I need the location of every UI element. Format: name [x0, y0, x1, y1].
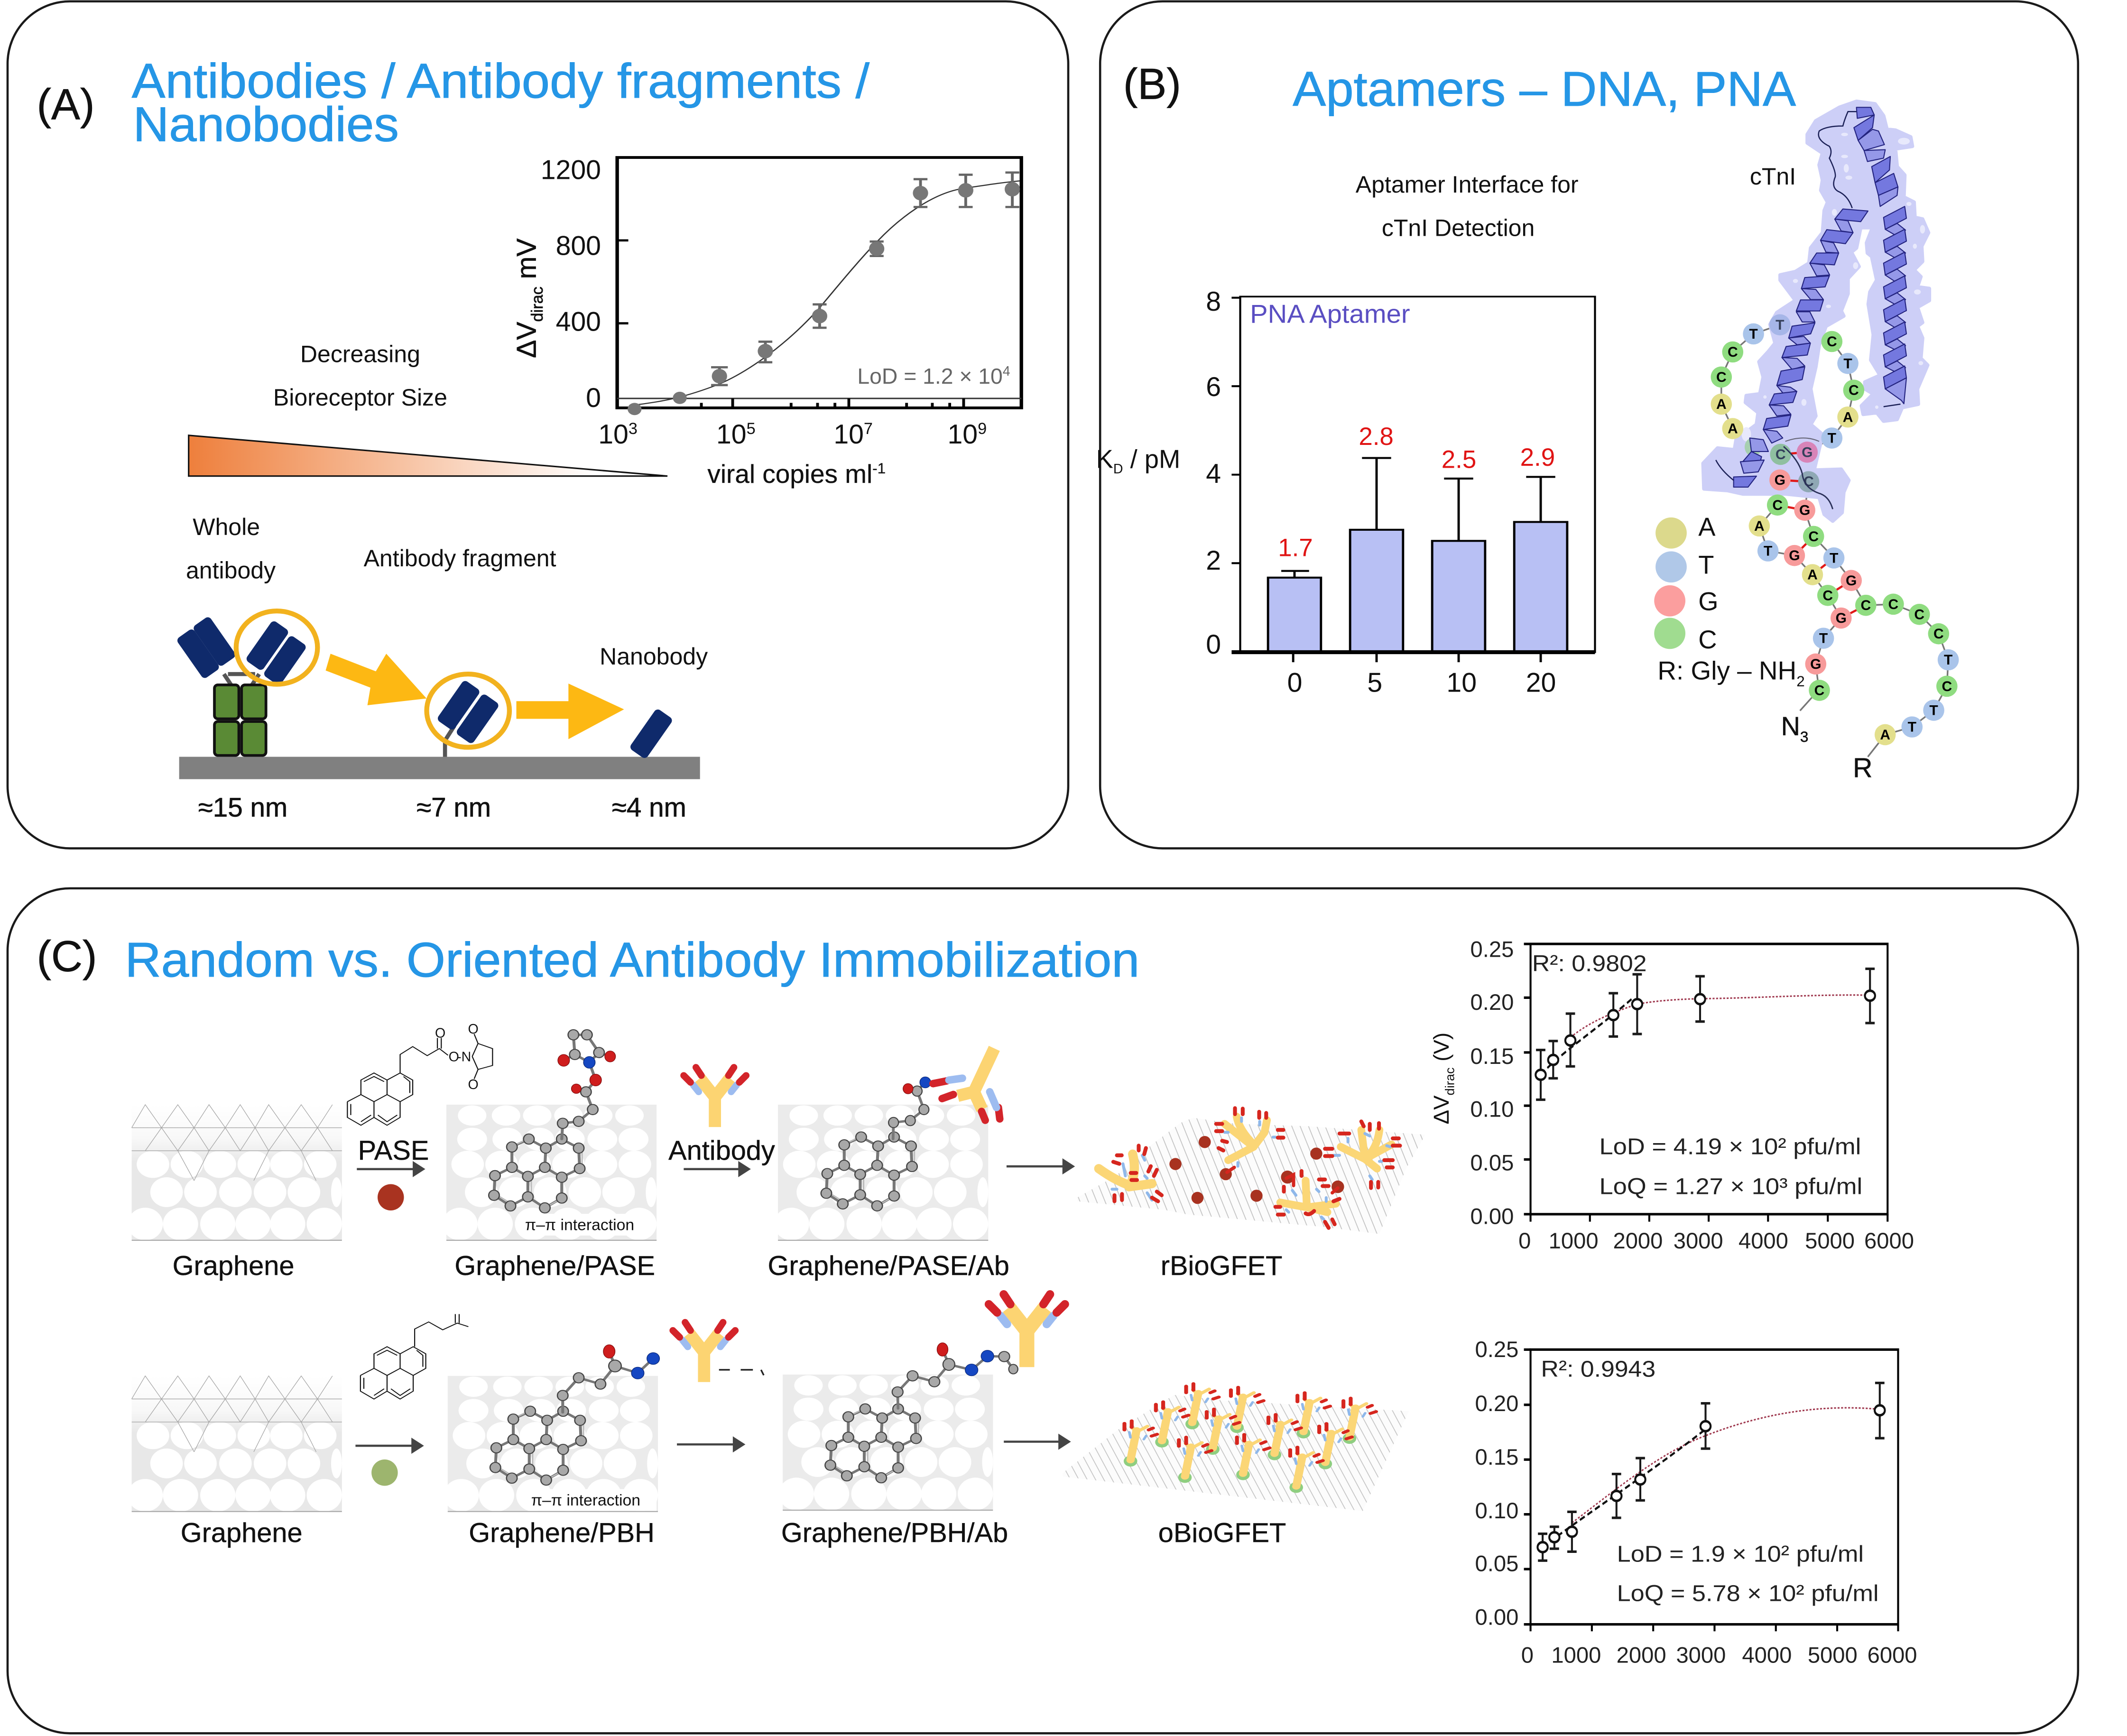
chart: rBioGFET calibration: 0.15 [1470, 1043, 1514, 1069]
chart: viral copies response curve: 10 [948, 419, 978, 450]
terminus labels: N [1781, 711, 1800, 741]
antibody, top row [684, 1067, 746, 1127]
arrow PASE [357, 1163, 423, 1175]
arrow: whole antibody to fragment [325, 654, 426, 705]
DNA nucleotide beads: T [1929, 702, 1938, 718]
chart: rBioGFET calibration: 0.00 [1470, 1204, 1514, 1229]
DNA nucleotide beads: A [1843, 409, 1853, 425]
arrow PBH [355, 1440, 422, 1452]
base pairs [1777, 452, 1866, 618]
terminus labels: 3 [1800, 729, 1808, 745]
DNA nucleotide beads: G [1799, 503, 1810, 518]
DNA nucleotide beads: C [1716, 369, 1727, 385]
chart: viral copies response curve: 10 [598, 419, 629, 450]
bioreceptor size label [273, 341, 447, 411]
chart: rBioGFET calibration [1429, 936, 1914, 1253]
subtitle: Aptamer Interface for [1356, 171, 1579, 198]
DNA nucleotide beads: C [1942, 679, 1952, 694]
PASE structure: O [435, 1025, 445, 1041]
DNA nucleotide beads: A [1754, 518, 1765, 534]
arrow PBH antibody [677, 1438, 743, 1450]
nucleotide legend: T [1698, 551, 1714, 580]
bottom row labels: oBioGFET [1158, 1518, 1286, 1548]
rBioGFET device [1077, 1108, 1425, 1234]
chart: rBioGFET calibration: R²: 0.9802 [1532, 951, 1647, 976]
bar chart: KD by condition: 6 [1206, 372, 1221, 402]
label: antibody fragment: Antibody fragment [364, 545, 556, 572]
graphene sheet, top row [128, 1105, 342, 1240]
PASE structure [347, 1022, 492, 1125]
bar chart: KD by condition: 0 [1287, 667, 1302, 698]
chart: rBioGFET calibration: ΔV [1429, 1095, 1453, 1124]
terminus labels [1781, 711, 1872, 783]
label: whole antibody: Whole [193, 514, 260, 540]
chart: viral copies response curve: 0 [586, 383, 601, 413]
DNA nucleotide beads: C [1776, 447, 1786, 462]
bottom row labels: Graphene [181, 1518, 303, 1548]
chart: rBioGFET calibration: LoQ = 1.27 × 10³ pfu/ml [1599, 1174, 1862, 1200]
chart: rBioGFET calibration: 3000 [1674, 1228, 1723, 1253]
chart: rBioGFET calibration: 1000 [1549, 1228, 1599, 1253]
DNA nucleotide beads: A [1807, 567, 1818, 583]
DNA nucleotide beads: T [1843, 356, 1852, 371]
PASE structure: -N [457, 1049, 471, 1064]
icon: antibody fragment [427, 674, 509, 757]
chart: viral copies response curve [512, 155, 1021, 489]
DNA nucleotide beads: C [1849, 383, 1859, 398]
chart: viral copies response curve: 7 [864, 420, 873, 438]
right alpha helix [1854, 107, 1906, 404]
nucleotide legend [1654, 512, 1805, 690]
chart: rBioGFET calibration: 0 [1518, 1228, 1531, 1253]
chart: oBioGFET calibration: 0.00 [1475, 1605, 1518, 1630]
arrow to rBioGFET [1007, 1160, 1073, 1173]
DNA nucleotide beads: C [1814, 683, 1824, 698]
panel C: random vs oriented [8, 888, 2078, 1733]
PASE structure: O [468, 1022, 479, 1037]
chart: viral copies response curve: 4 [1003, 364, 1010, 379]
panel label B: (B) [1123, 60, 1181, 109]
bar chart: KD by condition: 4 [1206, 459, 1221, 489]
size labels: ≈7 nm [416, 792, 491, 822]
chart: rBioGFET calibration: (V) [1429, 1033, 1453, 1067]
chart: viral copies response curve: dirac [528, 286, 546, 322]
label: whole antibody [186, 514, 276, 584]
chart: viral copies response curve: 400 [556, 307, 601, 337]
DNA nucleotide beads: G [1775, 472, 1785, 488]
chart: rBioGFET calibration: 0.20 [1470, 989, 1514, 1015]
top row labels: Graphene [173, 1251, 294, 1281]
arrow to oBioGFET [1004, 1436, 1069, 1448]
DNA nucleotide beads: T [1749, 326, 1758, 342]
chart: oBioGFET calibration: 2000 [1617, 1643, 1666, 1668]
chart: oBioGFET calibration: 0.25 [1475, 1337, 1518, 1362]
chart: rBioGFET calibration: 0.05 [1470, 1150, 1514, 1175]
bar chart: KD by condition: 20 [1526, 667, 1556, 698]
DNA aptamer backbone [1721, 325, 1948, 757]
chart: rBioGFET calibration: 2000 [1613, 1228, 1663, 1253]
panel A title: Nanobodies [133, 97, 399, 151]
chart: viral copies response curve: viral copies ml [707, 459, 872, 489]
bar chart: KD by condition: / pM [1123, 444, 1180, 473]
chart: viral copies response curve: 5 [747, 420, 756, 438]
bioreceptor size label: Decreasing [300, 341, 420, 367]
DNA nucleotide beads: G [1789, 548, 1800, 563]
label PASE: PASE [358, 1136, 429, 1166]
oBioGFET device [1063, 1384, 1409, 1511]
arrow Antibody [684, 1163, 749, 1175]
icon: green PBH ball [371, 1459, 398, 1486]
chart: oBioGFET calibration: 0.05 [1475, 1551, 1518, 1576]
nucleotide legend: R: Gly – NH [1657, 656, 1796, 685]
DNA nucleotide beads: G [1810, 656, 1821, 672]
top row labels: Graphene/PASE/Ab [768, 1251, 1009, 1281]
DNA nucleotide beads: T [1764, 543, 1773, 559]
chart: rBioGFET calibration: LoD = 4.19 × 10² pfu/ml [1599, 1134, 1861, 1159]
nucleotide legend: C [1698, 625, 1717, 654]
bottom row labels: Graphene/PBH [469, 1518, 655, 1548]
DNA nucleotide beads: A [1880, 727, 1890, 743]
bar chart: KD by condition: K [1096, 444, 1113, 473]
protein loops [1716, 111, 1900, 480]
graphene with PBH [444, 1345, 659, 1512]
chart: viral copies response curve: -1 [872, 460, 886, 477]
chart: oBioGFET calibration: 3000 [1676, 1643, 1726, 1668]
subtitle: cTnI Detection [1382, 215, 1535, 241]
top row labels [173, 1251, 1282, 1281]
chart: viral copies response curve: 1200 [541, 155, 601, 185]
left alpha helix [1734, 209, 1868, 487]
protein tail over aptamer [1784, 438, 1833, 509]
DNA nucleotide beads: A [1716, 397, 1727, 412]
DNA nucleotide beads: C [1808, 529, 1819, 545]
chart: viral copies response curve: 3 [629, 420, 638, 438]
DNA nucleotide beads: G [1846, 573, 1857, 589]
chart: viral copies response curve: ΔV [512, 322, 542, 358]
panel C title: Random vs. Oriented Antibody Immobilization [125, 933, 1139, 987]
decreasing size wedge [189, 435, 667, 476]
DNA nucleotide beads: T [1944, 652, 1953, 668]
DNA nucleotide beads: C [1914, 607, 1924, 622]
chart: oBioGFET calibration: R²: 0.9943 [1541, 1356, 1655, 1382]
chart: rBioGFET calibration: 6000 [1864, 1228, 1914, 1253]
panel A: antibodies [8, 1, 1068, 849]
panel A title: Antibodies / Antibody fragments / [132, 54, 870, 108]
bar chart: KD by condition: 2.9 [1520, 443, 1555, 471]
label: whole antibody: antibody [186, 557, 276, 584]
chart: oBioGFET calibration: LoD = 1.9 × 10² pfu/ml [1617, 1542, 1864, 1567]
bar chart: KD by condition: 10 [1446, 667, 1477, 698]
PBH structure [361, 1314, 468, 1399]
DNA nucleotide beads: T [1776, 317, 1785, 333]
DNA nucleotide beads: C [1822, 588, 1833, 603]
graphene sheet, bottom row [128, 1376, 342, 1512]
chart: rBioGFET calibration: 5000 [1805, 1228, 1855, 1253]
DNA nucleotide beads: C [1827, 334, 1837, 350]
DNA nucleotide beads: T [1819, 631, 1828, 646]
size labels: ≈4 nm [612, 792, 686, 822]
graphene with PASE and antibody [774, 1048, 1000, 1240]
protein: cTnI [1703, 102, 1929, 521]
label Antibody: Antibody [668, 1136, 775, 1166]
top row labels: rBioGFET [1161, 1251, 1282, 1281]
chart: rBioGFET calibration: 4000 [1739, 1228, 1788, 1253]
nucleotide legend: A [1698, 512, 1716, 541]
DNA nucleotide beads: C [1772, 498, 1783, 513]
bar chart: KD by condition: 2 [1206, 545, 1221, 576]
chart: viral copies response curve: LoD = 1.2 × 10 [857, 364, 1003, 388]
chart: viral copies response curve: 9 [978, 420, 987, 438]
DNA nucleotide beads: C [1803, 474, 1814, 489]
size labels [198, 792, 686, 822]
DNA nucleotide beads: G [1836, 610, 1847, 626]
DNA nucleotide beads [1711, 314, 1959, 745]
chart: viral copies response curve: 10 [716, 419, 747, 450]
chart: viral copies response curve: 10 [833, 419, 864, 450]
chart: oBioGFET calibration: 5000 [1808, 1643, 1858, 1668]
size labels: ≈15 nm [198, 792, 287, 822]
label: nanobody: Nanobody [600, 643, 708, 670]
subtitle [1356, 171, 1579, 241]
surface bar [179, 757, 700, 779]
nucleotide legend: 2 [1796, 673, 1805, 690]
DNA nucleotide beads: C [1860, 598, 1871, 613]
bar chart: KD by condition: 2.5 [1442, 445, 1476, 473]
chart: oBioGFET calibration: 6000 [1868, 1643, 1917, 1668]
panel A title [132, 54, 870, 151]
chart: oBioGFET calibration: 0.10 [1475, 1498, 1518, 1523]
PASE structure: O [468, 1077, 479, 1092]
arrow: fragment to nanobody [517, 683, 624, 739]
terminus labels: R [1853, 753, 1872, 783]
bioreceptor size label: Bioreceptor Size [273, 384, 447, 411]
DNA nucleotide beads: T [1830, 550, 1839, 566]
bar chart: KD by condition [1096, 286, 1595, 698]
DNA nucleotide beads: C [1728, 344, 1738, 360]
chart: oBioGFET calibration: 0.15 [1475, 1444, 1518, 1469]
label cTnI: cTnI [1750, 163, 1796, 190]
chart: oBioGFET calibration: 1000 [1551, 1643, 1601, 1668]
icon: nanobody [629, 708, 674, 759]
DNA nucleotide beads: G [1802, 445, 1813, 461]
chart: oBioGFET calibration: 0 [1521, 1643, 1534, 1668]
icon: red PASE ball [378, 1184, 404, 1210]
label pi-pi interaction: π–π interaction [531, 1491, 640, 1509]
bar chart: KD by condition: 5 [1367, 667, 1382, 698]
bar chart: KD by condition: PNA Aptamer [1250, 300, 1410, 329]
panel B title: Aptamers – DNA, PNA [1293, 62, 1796, 116]
panel B: aptamers [1096, 1, 2078, 849]
panel label A: (A) [37, 81, 94, 129]
graphene with PBH and antibody [779, 1294, 1065, 1510]
antibody, bottom row [673, 1322, 764, 1382]
chart: oBioGFET calibration: 0.20 [1475, 1391, 1518, 1416]
panel label C: (C) [37, 932, 97, 980]
chart: oBioGFET calibration: 4000 [1742, 1643, 1792, 1668]
nucleotide legend: G [1698, 587, 1718, 616]
label pi-pi interaction: π–π interaction [525, 1216, 634, 1234]
bar chart: KD by condition: 2.8 [1359, 423, 1394, 451]
bar chart: KD by condition: 8 [1206, 286, 1221, 317]
bottom row labels [181, 1518, 1286, 1548]
top row labels: Graphene/PASE [454, 1251, 655, 1281]
DNA nucleotide beads: C [1888, 597, 1898, 612]
chart: oBioGFET calibration [1475, 1337, 1917, 1668]
protein surface [1703, 102, 1929, 521]
bar chart: KD by condition: 1.7 [1278, 534, 1313, 562]
chart: rBioGFET calibration: 0.25 [1470, 936, 1514, 961]
DNA nucleotide beads: T [1908, 720, 1917, 735]
chart: rBioGFET calibration: 0.10 [1470, 1097, 1514, 1122]
bar chart: KD by condition: D [1113, 462, 1123, 477]
DNA nucleotide beads: T [1828, 431, 1837, 446]
chart: viral copies response curve: 800 [556, 231, 601, 261]
DNA nucleotide beads: A [1728, 421, 1738, 437]
bottom row labels: Graphene/PBH/Ab [781, 1518, 1008, 1548]
PASE structure: O [449, 1049, 459, 1064]
graphene with PASE [442, 1030, 657, 1240]
chart: oBioGFET calibration: LoQ = 5.78 × 10² pfu/ml [1617, 1580, 1878, 1606]
chart: rBioGFET calibration: dirac [1443, 1067, 1457, 1095]
DNA nucleotide beads: C [1933, 626, 1944, 642]
icon: whole antibody [176, 611, 317, 756]
bar chart: KD by condition: 0 [1206, 629, 1221, 660]
chart: viral copies response curve: mV [512, 239, 542, 286]
